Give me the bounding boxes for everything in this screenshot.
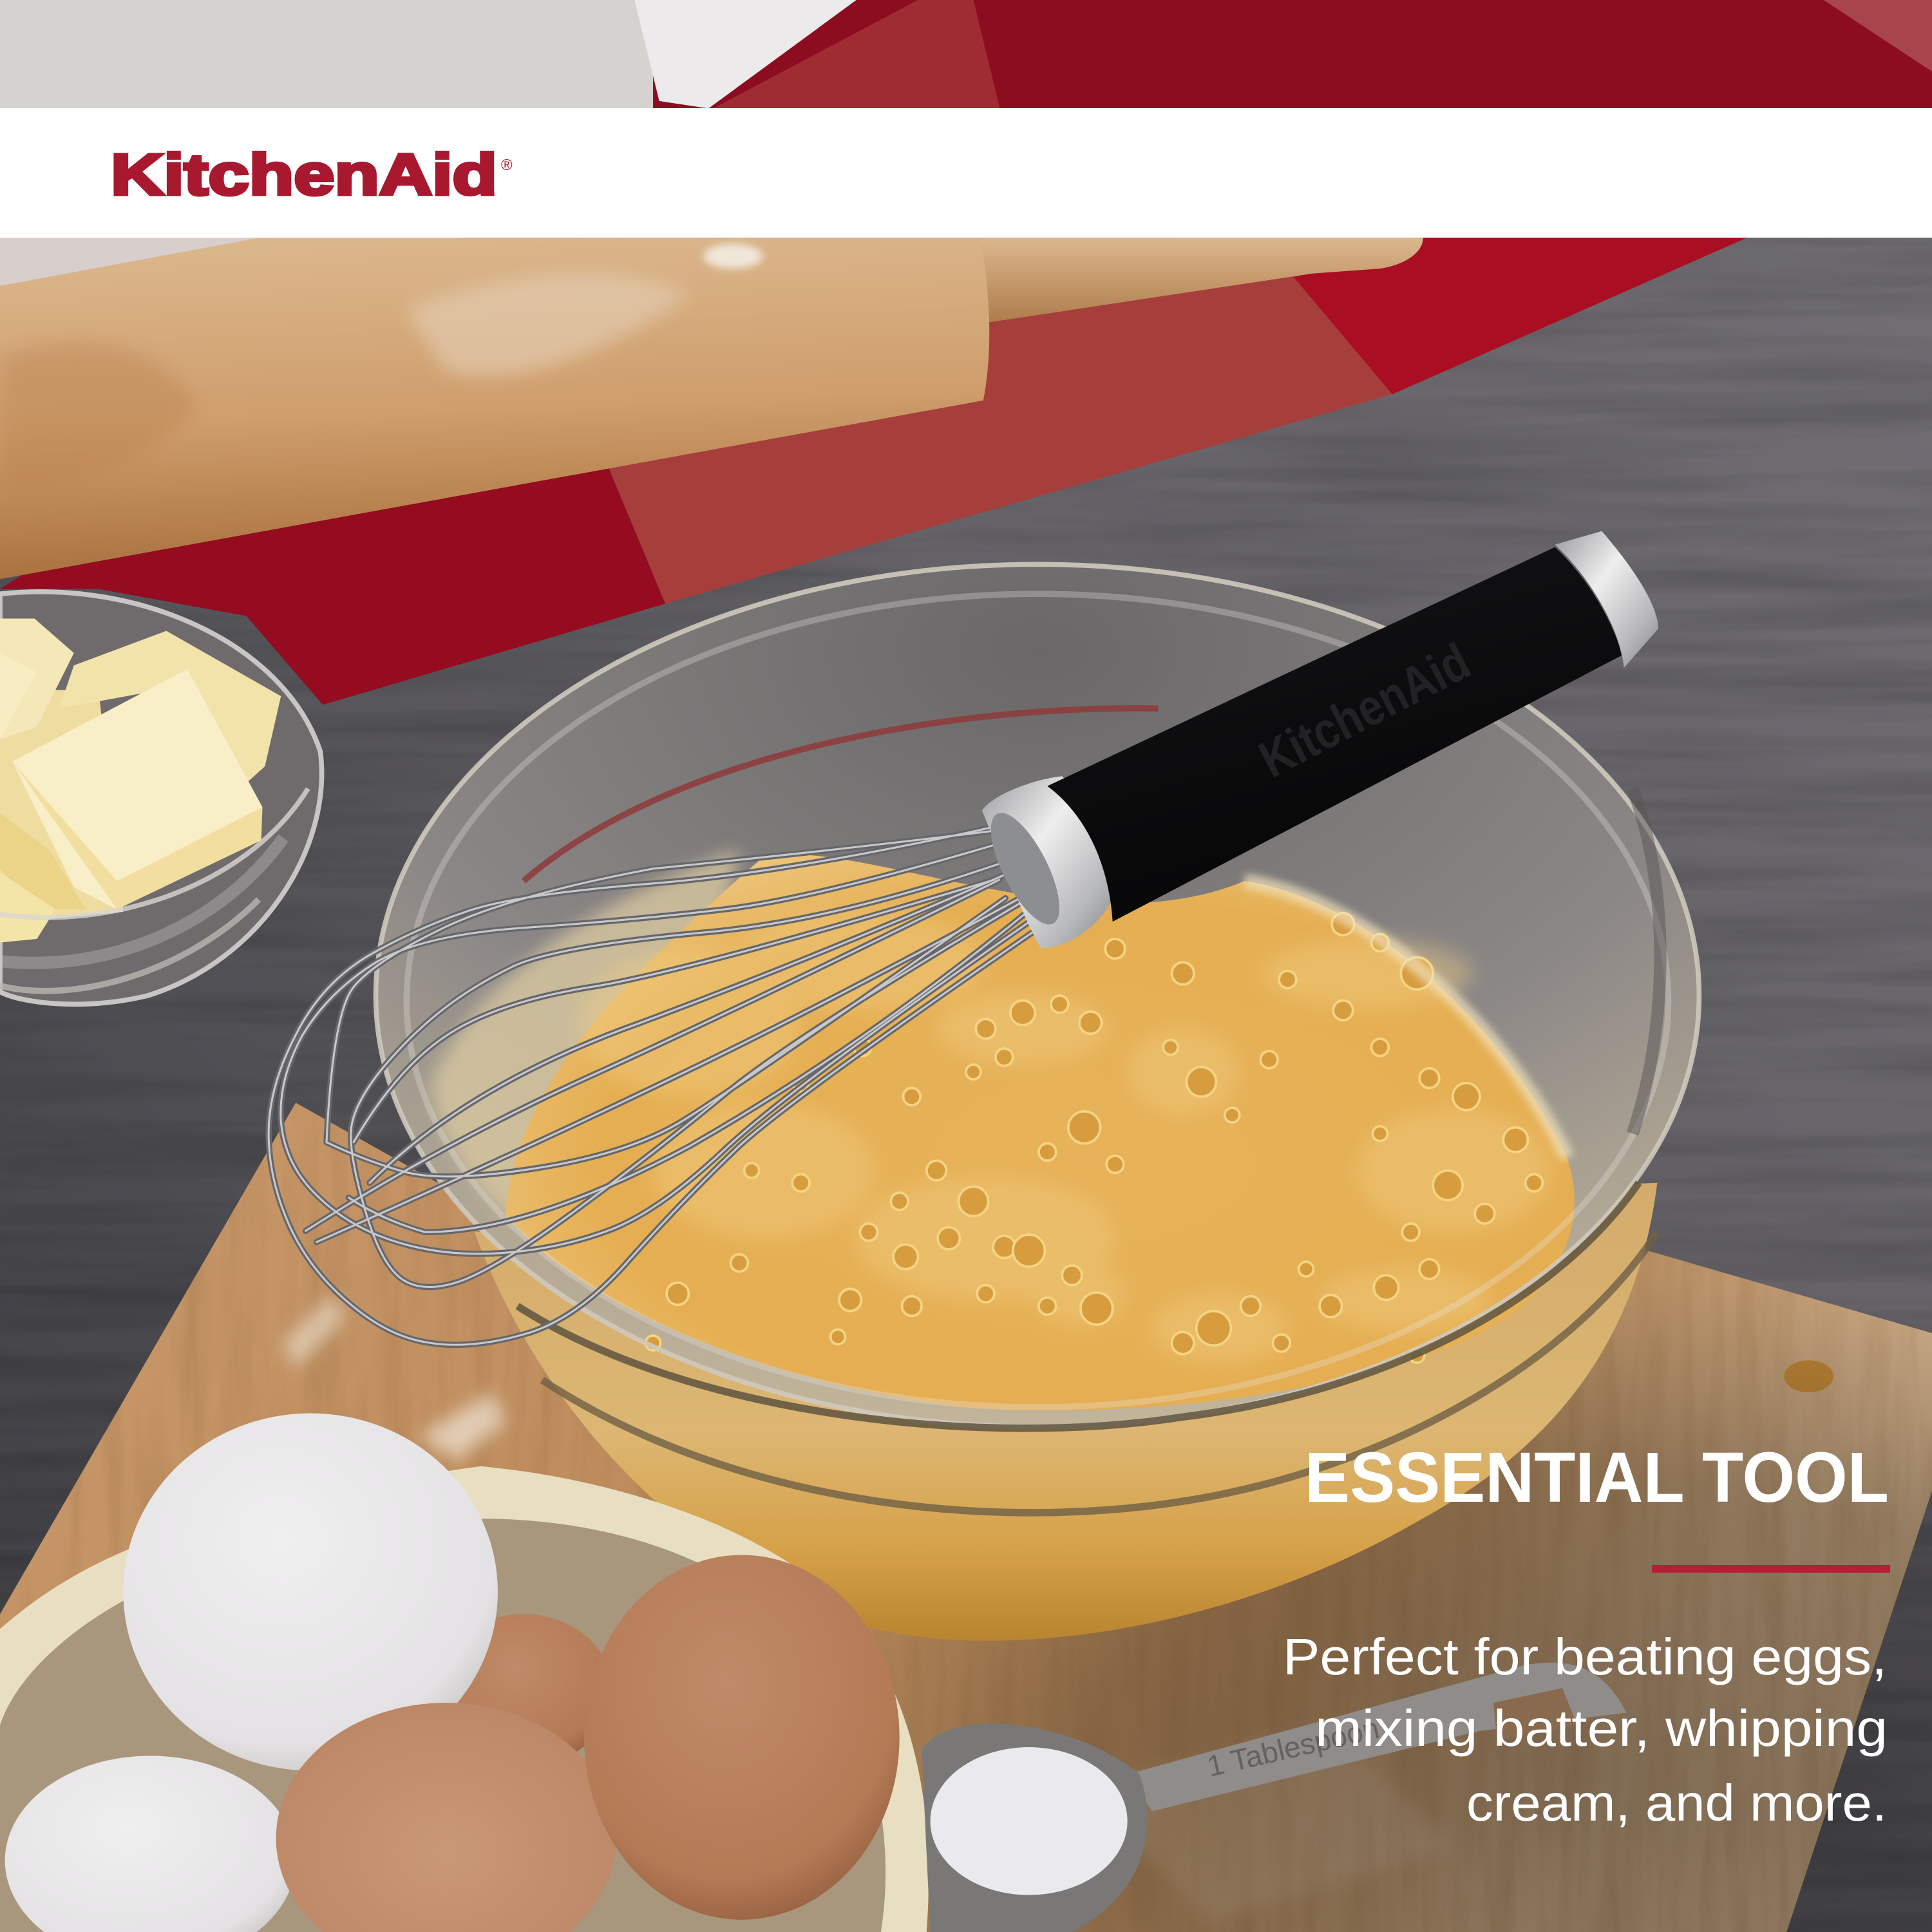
eggs — [5, 1414, 900, 1932]
rolling pin — [0, 238, 1423, 579]
butter cubes — [0, 618, 281, 943]
engraved label: 1 Tablespoon — [1204, 1711, 1382, 1783]
foam patches — [579, 912, 1550, 1363]
red towel — [0, 234, 1750, 705]
butter bowl — [0, 592, 322, 1004]
foam ring at the pool edge — [1244, 881, 1567, 1158]
body text: cream, and more. — [1466, 1774, 1887, 1832]
logo band — [0, 108, 1932, 238]
body text: Perfect for beating eggs, — [1283, 1628, 1887, 1685]
cutting board — [0, 1084, 1932, 1932]
glass mixing bowl — [376, 564, 1699, 1641]
large white egg — [123, 1414, 498, 1770]
KitchenAid logo: ® — [501, 156, 513, 174]
pale bowl floor at left — [431, 850, 739, 1294]
body text: mixing batter, whipping — [1315, 1700, 1888, 1757]
measuring spoon — [922, 1663, 1627, 1932]
KitchenAid logo: KitchenAid — [111, 143, 497, 207]
top strip behind the band: dish and red towel — [0, 0, 1932, 111]
bowl rims — [376, 564, 1699, 1513]
small brown egg — [435, 1614, 612, 1767]
bowl lower body with egg — [475, 1183, 1657, 1641]
steel collar — [982, 776, 1115, 949]
embossed handle logo: KitchenAid — [1250, 632, 1479, 789]
red towel reflection — [524, 708, 1158, 881]
whisk wires — [269, 824, 1054, 1345]
egg foam bubbles — [646, 913, 1542, 1363]
heading: ESSENTIAL TOOL — [1305, 1438, 1889, 1517]
bowl rim fill — [376, 564, 1699, 1427]
white egg back — [5, 1756, 296, 1932]
cream dish — [0, 1466, 929, 1932]
steel end cap — [1555, 531, 1658, 668]
dark shade behind copy — [764, 1232, 1932, 1932]
brown egg centre — [276, 1703, 616, 1932]
glass dish — [0, 592, 322, 1004]
whisk — [269, 531, 1658, 1345]
black handle — [1047, 547, 1622, 922]
body text — [1283, 1628, 1888, 1832]
collar face — [978, 804, 1073, 934]
glass highlights — [0, 788, 308, 991]
cloth and dish below band — [0, 234, 493, 286]
large brown egg — [584, 1555, 900, 1920]
beaten egg — [505, 854, 1575, 1410]
red rule — [1652, 1565, 1890, 1573]
copy block — [1283, 1438, 1890, 1832]
dish interior — [0, 1519, 886, 1932]
wire highlights — [269, 824, 1054, 1345]
